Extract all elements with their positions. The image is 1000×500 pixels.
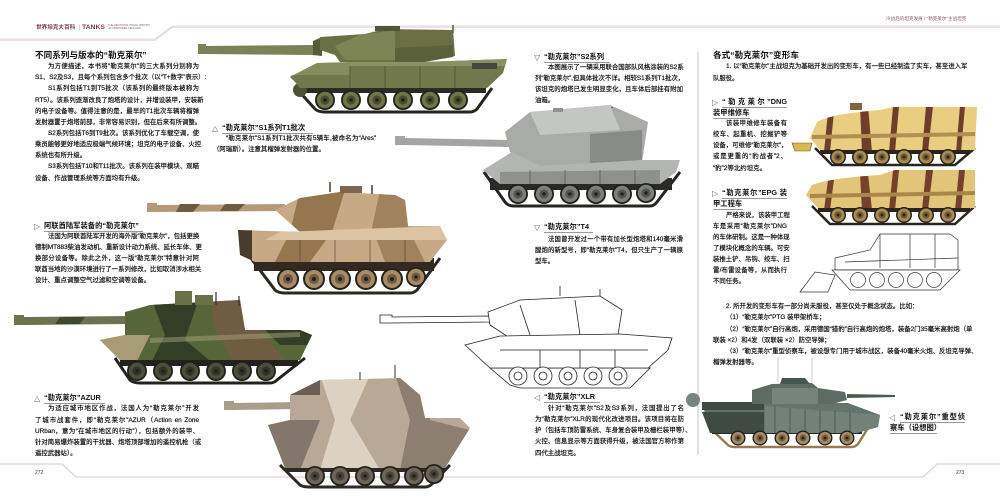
text: 乘员能够更好地适应极端气候环境；坦克的电子设备、火控 [35,141,201,148]
text: 或是更重的“豹战者”2、 [713,153,787,160]
heading line 2: 装甲维修车 [713,108,749,117]
tank: T4 line drawing [380,286,672,388]
text: 车是采用“勒克莱尔”DNG [713,223,787,230]
text block: XLR [534,392,692,457]
text: 法国曾开发过一个带有加长型炮塔和140毫米滑 [548,236,683,243]
text: 四代主战坦克。 [535,450,580,457]
text: THE DEFINITIVE VISUAL HISTORY [108,24,150,27]
heading: “勒克莱尔”重型侦 [900,412,965,421]
running header: left page [36,24,150,31]
heading: “勒克莱尔”EPG 装 [722,188,787,197]
text: 型车。 [535,258,554,265]
text: 队服役。 [713,75,739,82]
text: （2）“勒克莱尔”自行高炮，采用德国“猎豹”自行高炮的炮塔，装备2门35毫米高射炮（单 [726,326,972,333]
text: 本图展示了一辆采用联合国部队风格涂装的S2系 [548,64,684,71]
text: 设备、作战管理系统等方面均有升级。 [35,175,144,182]
tank: AZUR green camo [14,291,320,383]
tank: AZUR urban camo [224,365,475,487]
text: 该坦克的炮塔已发生明显变化，且车体后部挂有附加 [535,86,683,93]
text: 的电子设备等。值得注意的是，最早的T1批次车辆将榴弹 [35,108,199,115]
page number 272: 272 [35,470,43,476]
vehicle: DNG recovery [792,100,980,165]
text: 油箱。 [535,97,554,104]
marker: △ [34,394,40,403]
heading: 不同系列与版本的“勒克莱尔” [35,50,147,60]
text block: variants intro [713,50,968,82]
text: 联装 ×2）和4发（双联装 ×2）防空导弹； [713,337,831,344]
marker: ▷ [712,189,718,198]
vehicle: heavy reconnaissance concept [686,378,895,447]
heading [44,392,105,404]
text: 为适应城市地区作战，法国人为“勒克莱尔”开发 [48,405,199,412]
heading: “勒克莱尔”S1系列T1批次 [222,123,305,132]
text: S1系列包括T1到T5批次（该系列的最终版本被称为 [48,85,199,92]
text block: EPG [712,188,790,285]
marker: ▷ [712,98,718,107]
text block: S1 T1 [212,123,376,153]
marker: ◁ [889,413,895,422]
heading [544,221,593,233]
heading: 阿联酋陆军装备的“勒克莱尔” [44,221,139,230]
tank: S2 grey [395,105,680,206]
text: 膛炮的新型号，即“勒克莱尔”T4，但只生产了一辆原 [535,247,683,254]
text: | [79,25,81,31]
text: 护（包括车顶防雷系统、车身复合装甲及栅栏装甲等）、 [535,427,692,434]
heading [544,391,600,403]
text: 法国为阿联酋陆军开发的海外版“勒克莱尔”，包括更换 [48,233,199,240]
text: 为方便描述，本书将“勒克莱尔”的三大系列分别称为 [48,63,199,70]
text: 火控、信息显示等方面获得升级，被法国官方称作第 [535,438,684,445]
text: 设备，可维修“勒克莱尔”， [713,142,788,149]
heading: 各式“勒克莱尔”变形车 [713,50,799,60]
text block: S2 [534,52,684,104]
heading: “勒克莱尔”T4 [544,222,589,231]
text block: DNG [712,97,788,172]
text: （阿瑞斯）。注意其榴弹发射器的位置。 [213,146,325,153]
text: 了模块化概念的车辆。可安 [713,245,790,252]
heading [222,122,313,134]
text: S1、S2及S3，且每个系列包含多个批次（以“T+数字”表示）: [35,74,206,81]
text block: series and versions [35,50,206,182]
text: URban，意为“在城市地区的行动”），包括额外的装甲、 [35,428,199,435]
text: S3系列包括T10和T11批次。该系列在装甲模块、观瞄 [48,163,199,170]
text: 针对简易爆炸装置的干扰器、炮塔顶部增加的遥控机枪（或 [35,439,201,446]
text: RT5）。该系列逐渐改良了炮塔的设计，并增设装甲，安装新 [35,97,204,104]
text: 不同任务。 [713,278,745,285]
text: TANKS [82,24,105,31]
text block: concept variants [713,302,977,366]
marker: ▽ [534,223,540,232]
text: 为“勒克莱尔”XLR的现代化改进项目。该项目将在防 [535,416,684,423]
text: 该装甲维修车装备有 [726,120,787,127]
text: 雷/布雷设备等，从而执行 [713,267,787,274]
vehicle: EPG line drawing with plough [800,234,960,292]
text block: T4 [534,222,683,265]
text: （3）“勒克莱尔”重型侦察车，被设想专门用于城市战区，装备40毫米火炮、反坦克导弹、 [726,348,977,355]
text: （1）“勒克莱尔”PTG 装甲架桥车； [726,314,825,321]
heading: “勒克莱尔”DNG [722,97,787,106]
text: S2系列包括T6到T9批次。该系列优化了车载空调，使 [48,130,199,137]
text: 的车体研制。这是一种体现 [713,234,790,241]
heading: “勒克莱尔”S2系列 [544,52,604,61]
text: 严格来说，该装甲工程 [726,212,790,219]
vehicle: EPG engineer [803,165,980,224]
caption: heavy reconnaissance [889,412,965,434]
text: OF ARMOURED VEHICLES [108,27,141,30]
heading: “勒克莱尔”AZUR [44,393,101,402]
marker: ▽ [534,53,540,62]
text: “豹”2等北约坦克。 [713,165,766,172]
text: 世界坦克大百科 [36,25,75,31]
marker: ◁ [534,393,540,402]
text: 遥控武器站）。 [35,450,77,457]
text: 针对“勒克莱尔”S2及S3系列，法国提出了名 [548,405,684,412]
tank: UAE desert [147,182,460,293]
page number 273: 273 [956,470,964,476]
text: “勒克莱尔”S1系列T1批次共有5辆车,被命名为“Ares” [226,135,376,142]
heading [544,51,610,63]
text: 列“勒克莱尔”,但具体批次不详。相较S1系列T1批次， [535,75,684,82]
text: 2. 所开发的变形车有一部分尚未服役，甚至仅处于概念状态。比如： [726,303,918,310]
heading line 2: 甲工程车 [713,199,742,208]
running header: right page: 冷战后的坦克发展 / “勒克莱尔”主战坦克 [886,16,966,21]
text: 设计、重点调整空气过滤和空调等设备。 [35,277,150,284]
heading line 2: 察车（设想图） [890,423,941,432]
text: 德制MT883柴油发动机、重新设计动力系统、延长车体、更 [35,244,202,251]
marker: △ [212,124,218,133]
text block: UAE version [34,221,202,284]
text: 榴弹发射器等。 [713,359,758,366]
heading: “勒克莱尔”XLR [544,392,595,401]
text: 系统也有所升级。 [35,152,86,159]
text: 了城市战套件，即“勒克莱尔”AZUR（Action en Zone [35,417,199,424]
text: 装推土铲、吊钩、绞车、扫 [713,256,790,263]
text: 绞车、起重机、挖掘铲等 [713,131,787,138]
marker: ▷ [34,222,40,231]
text: 换部分设备等。除此之外，这一版“勒克莱尔”特意针对阿 [35,255,199,262]
text: 联酋当地的沙漠环境进行了一系列修改，比如取消涉水相关 [35,266,201,273]
text: 发射器置于炮塔前部，非常容易识别，但在后来有所调整。 [35,119,201,126]
tank: S1 T1 olive [198,25,507,112]
text block: AZUR [34,393,201,457]
text: 1. 以“勒克莱尔”主战坦克为基础开发出的变形车，有一些已经制造了实车，甚至进入军 [726,63,967,70]
